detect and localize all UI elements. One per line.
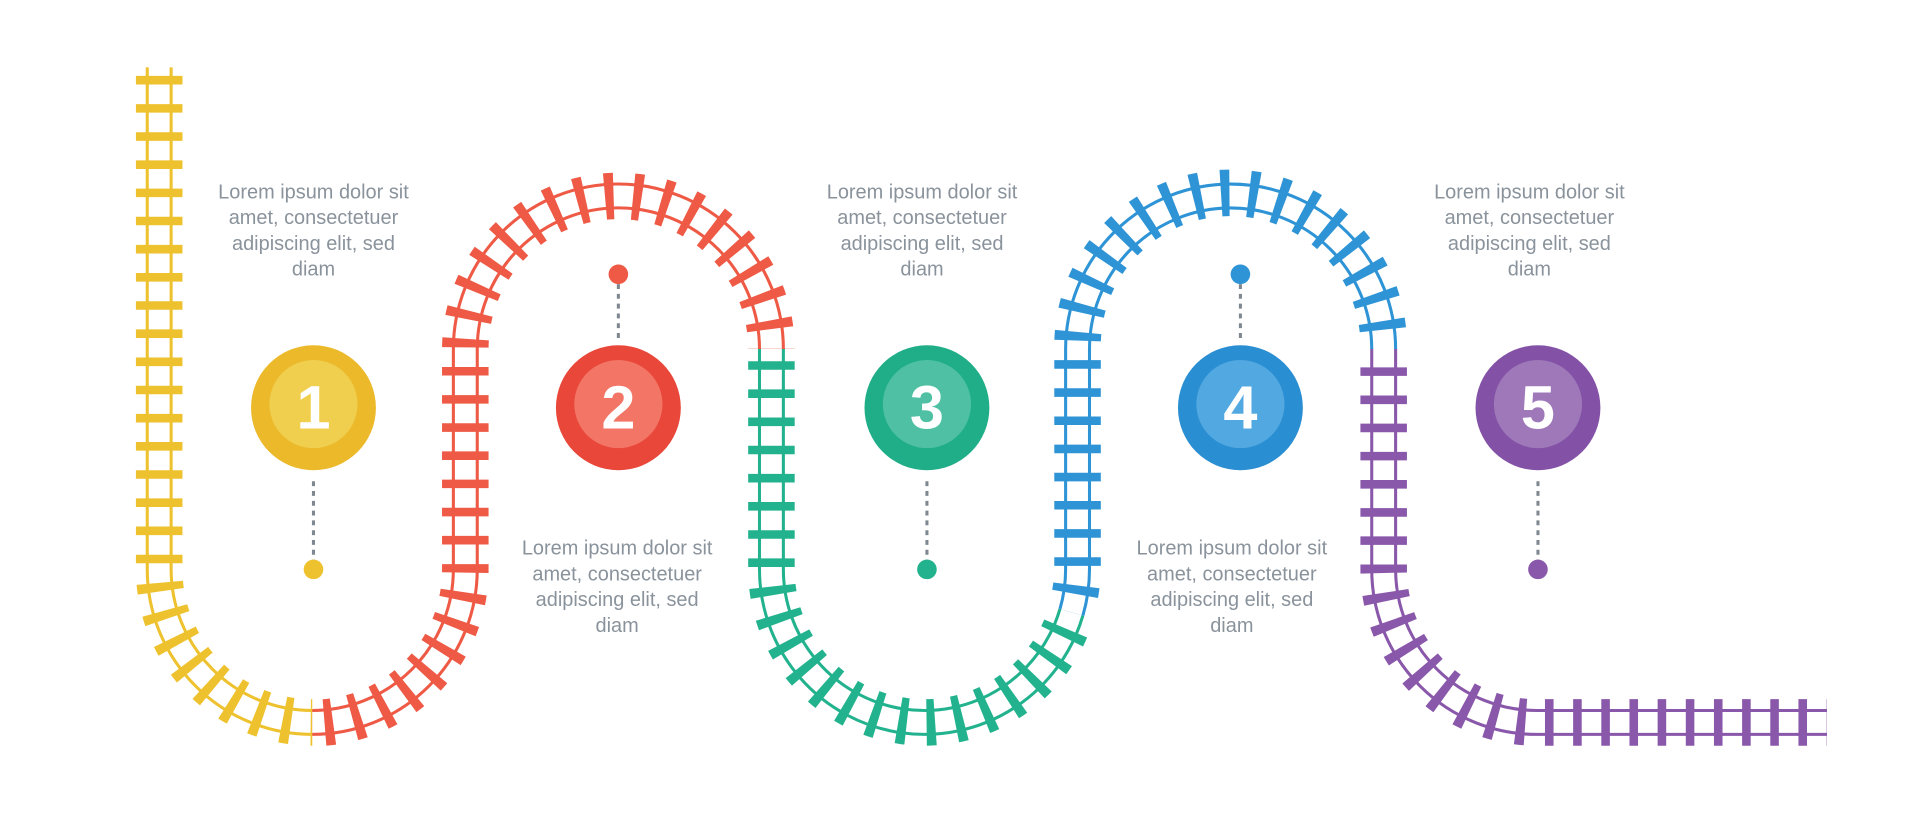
connector 4: [1231, 264, 1250, 340]
badge 2: [556, 345, 681, 470]
connector 1: [304, 481, 323, 579]
text 4: Lorem ipsum dolor sit: [1137, 538, 1328, 560]
text 5: Lorem ipsum dolor sit: [1434, 181, 1625, 203]
text 1: diam: [292, 259, 335, 281]
badge 5: [1476, 345, 1600, 470]
text 1: adipiscing elit, sed: [232, 233, 395, 255]
track: purple: [1384, 349, 1831, 722]
text 1: amet, consectetuer: [229, 207, 399, 229]
step 3: [827, 181, 1018, 579]
text 5: diam: [1508, 259, 1551, 281]
text 2: Lorem ipsum dolor sit: [522, 538, 713, 560]
badge 2: 2: [601, 374, 635, 442]
text 3: adipiscing elit, sed: [841, 233, 1004, 255]
step 4: [1137, 264, 1328, 637]
step 5: [1434, 181, 1625, 579]
text 2: adipiscing elit, sed: [536, 589, 699, 611]
text 5: adipiscing elit, sed: [1448, 233, 1611, 255]
text 3: Lorem ipsum dolor sit: [827, 181, 1018, 203]
text 3: amet, consectetuer: [837, 207, 1007, 229]
text 4: adipiscing elit, sed: [1150, 589, 1313, 611]
text 2: amet, consectetuer: [532, 563, 702, 585]
text 4: amet, consectetuer: [1147, 563, 1317, 585]
badge 3: [864, 345, 989, 470]
badge 4: [1178, 345, 1303, 470]
badge 5: 5: [1521, 374, 1555, 442]
text 5: amet, consectetuer: [1445, 207, 1615, 229]
track: teal: [771, 349, 1071, 722]
text 2: diam: [596, 615, 639, 637]
badge 4: 4: [1223, 374, 1257, 442]
badge 1: 1: [296, 374, 331, 442]
connector 2: [609, 264, 628, 340]
track: red: [312, 196, 771, 722]
railway track: [159, 61, 1831, 722]
text 4: diam: [1210, 615, 1253, 637]
badge 1: [251, 345, 376, 470]
track: yellow: [159, 61, 312, 722]
step 1: [218, 181, 409, 579]
step 2: [522, 264, 713, 637]
track: blue: [1071, 193, 1384, 612]
text 3: diam: [900, 259, 944, 281]
connector 3: [917, 481, 937, 579]
text 1: Lorem ipsum dolor sit: [218, 181, 409, 203]
badge 3: 3: [910, 374, 944, 442]
connector 5: [1528, 481, 1548, 579]
